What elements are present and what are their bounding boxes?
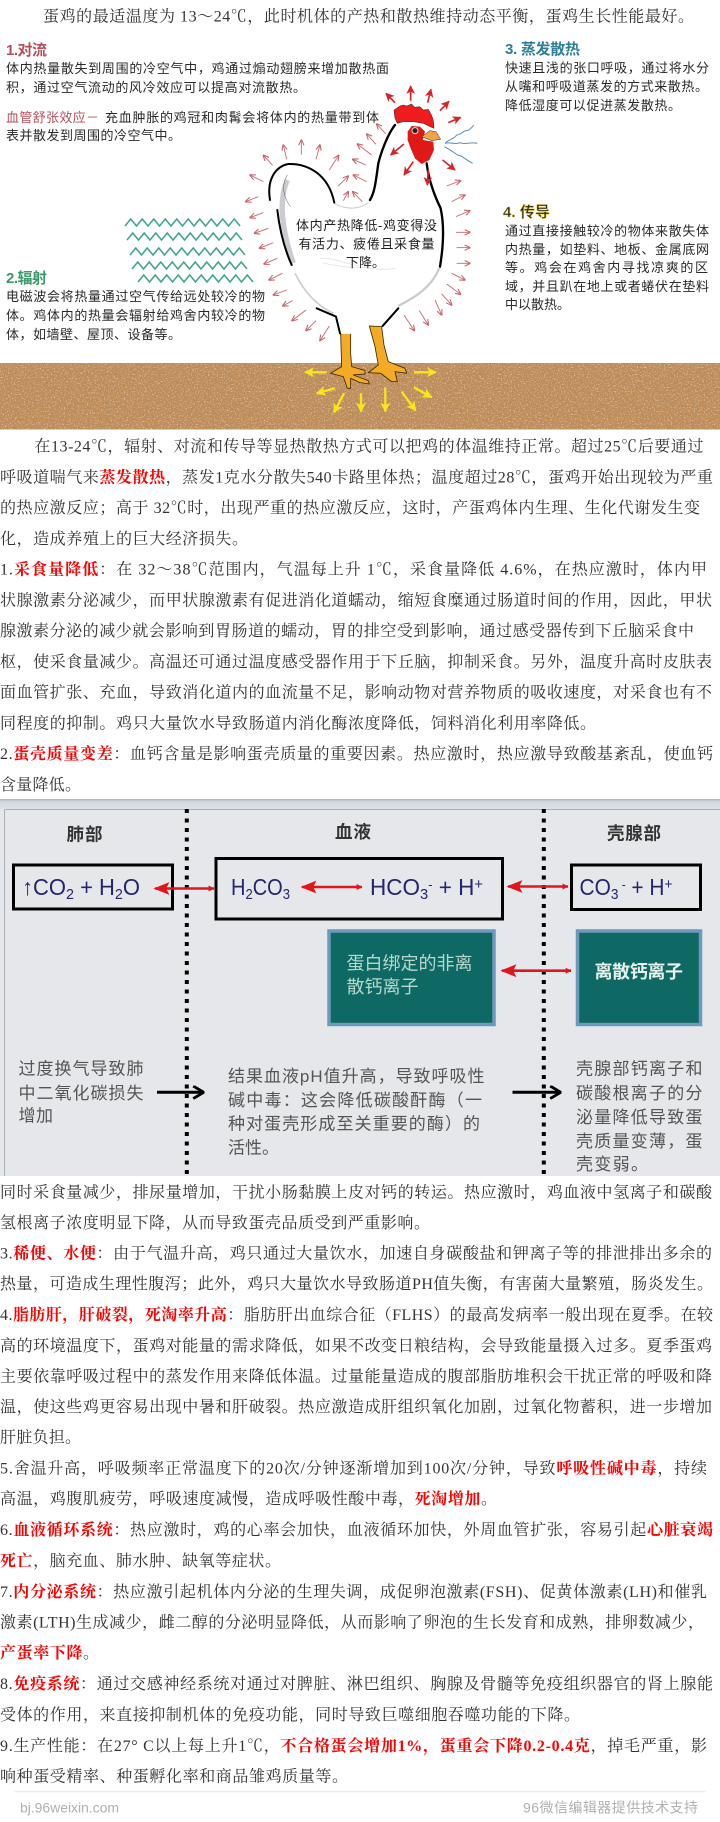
paragraph: temperature ranges: 在13-24℃，辐射、对流和传导等显热散热方式可以把鸡的体温维持正常。超过25℃后要通过 [34, 436, 703, 456]
text block: convection: 表并散发到周围的冷空气中。 [6, 128, 181, 143]
paragraph 3: loose droppings [0, 1244, 713, 1293]
lung outcome text: 增加 [18, 1106, 53, 1126]
text block: evaporation: 从嘴和呼吸道蒸发的方式来散热。 [505, 79, 708, 94]
text block: evaporation: 快速且浅的张口呼吸，通过将水分 [505, 60, 709, 76]
box: blood equation [216, 858, 502, 919]
paragraph: temperature ranges [0, 436, 713, 548]
paragraph 4: fatty liver: 高的环境温度下，蛋鸡对能量的需求降低，如果不改变日粮结构，会导致能量摄入过多。夏季蛋鸡 [0, 1336, 712, 1355]
text block: convection: 充血肿胀的鸡冠和肉髯会将体内的热量带到体 [105, 110, 379, 125]
red exchange arrows [155, 886, 571, 971]
ground [0, 363, 720, 430]
paragraph 6: circulatory system: 死亡，脑充血、肺水肿、缺氧等症状。 [0, 1551, 281, 1570]
box: blood equation: 2 [245, 886, 253, 903]
column headings [66, 822, 661, 844]
paragraph 3: loose droppings: 热量，可造成生理性腹泻；此外，鸡只大量饮水导致肠道PH值失衡，有害菌大量繁殖，肠炎发生。 [0, 1274, 713, 1293]
paragraph 7: endocrine system: 7.内分泌系统：热应激引起机体内分泌的生理失调，成促卵泡激素(FSH)、促黄体激素(LH)和催乳 [0, 1582, 707, 1601]
box: shell gland equation: + H [626, 874, 665, 900]
text block: conduction: 内热量，如垫料、地板、金属底网 [505, 242, 709, 257]
box: blood equation: - [428, 877, 432, 892]
paragraph 5: respiration [0, 1458, 707, 1508]
conduction arrows [305, 372, 436, 413]
paragraph 9: production performance: 9.生产性能：在27° C以上每上升1℃，不合格蛋会增加1%，蛋重会下降0.2-0.4克，掉毛严重，影 [0, 1736, 707, 1756]
chicken body caption: 下降。 [346, 255, 385, 270]
shell gland outcome text: 泌量降低导致蛋 [576, 1108, 702, 1127]
paragraph 8: immune system: 受体的作用，来直接抑制机体的免疫功能，同时导致巨噬细胞吞噬功能的下降。 [0, 1706, 580, 1724]
paragraph: reduced urine and calcium transport [0, 1184, 713, 1232]
paragraph 5: respiration: 高温，鸡腹肌疲劳，呼吸速度减慢，造成呼吸性酸中毒，死淘增加。 [0, 1489, 497, 1508]
footer: 96微信编辑器提供技术支持 [523, 1800, 698, 1816]
box: lung equation: 2 [66, 886, 74, 903]
footer [15, 1792, 705, 1816]
teal box: ionized calcium: 离散钙离子 [594, 961, 683, 982]
paragraph 2: eggshell quality [0, 744, 713, 794]
text block: evaporation [505, 40, 709, 113]
text block: radiation [6, 269, 265, 342]
box: lung equation: ↑CO [22, 874, 68, 900]
box: blood equation: + H [432, 874, 474, 900]
paragraph 1: reduced feed intake: 1.采食量降低：在 32～38℃范围内，气温每上升 1℃，采食量降低 4.6%，在热应激时，体内甲 [0, 560, 707, 578]
paragraph 1: reduced feed intake: 面血管扩张、充血，导致消化道内的血流量不足，影响动物对营养物质的吸收速度，对采食也有不 [0, 682, 712, 702]
paragraph 6: circulatory system: 6.血液循环系统：热应激时，鸡的心率会加快，血液循环加快，外周血管扩张，容易引起心脏衰竭 [0, 1520, 713, 1539]
blood outcome text: 种对蛋壳形成至关重要的酶）的 [228, 1114, 480, 1134]
paragraph 1: reduced feed intake: 状腺激素分泌减少，而甲状腺激素有促进消化道蠕动，缩短食糜通过肠道时间的作用，因此，甲状 [0, 591, 712, 609]
paragraph 4: fatty liver: 温，使这些鸡更容易出现中暑和肝破裂。热应激造成肝组织氧化加剧，过氧化物蓄积，进一步增加 [0, 1397, 712, 1416]
blood outcome text [228, 1067, 484, 1158]
column headings: 肺部 [66, 824, 102, 844]
column divider dotted lines [187, 809, 544, 1176]
paragraph: reduced urine and calcium transport: 氢根离子浓度明显下降，从而导致蛋壳品质受到严重影响。 [0, 1214, 430, 1232]
teal box: ionized calcium [578, 931, 700, 1024]
teal box: protein-bound calcium [329, 931, 494, 1024]
text block: evaporation: 3. 蒸发散热 [505, 40, 580, 58]
chicken body [269, 120, 444, 334]
paragraph 1: reduced feed intake: 腺激素分泌的减少就会影响到胃肠道的蠕动，胃的排空受到影响，通过感受器传到下丘脑采食中 [0, 622, 694, 640]
chicken shading [282, 180, 439, 313]
text block: radiation: 电磁波会将热量通过空气传给远处较冷的物 [6, 289, 265, 304]
chicken face [408, 126, 434, 164]
chicken body caption [296, 218, 437, 270]
box: shell gland equation: - [618, 877, 626, 892]
paragraph 5: respiration: 5.舍温升高，呼吸频率正常温度下的20次/分钟逐渐增加到100次/分钟，导致呼吸性碱中毒，持续 [0, 1458, 707, 1478]
paragraph 2: eggshell quality: 2.蛋壳质量变差：血钙含量是影响蛋壳质量的重要因素。热应激时，热应激导致酸基紊乱，使血钙 [0, 744, 713, 763]
chicken comb [394, 104, 434, 128]
blood outcome text: 碱中毒：这会降低碳酸酐酶（一 [228, 1091, 482, 1110]
box: blood equation: + [474, 876, 483, 893]
shell gland outcome text: 壳腺部钙离子和 [576, 1060, 702, 1078]
text block: radiation: 体，如墙壁、屋顶、设备等。 [6, 327, 181, 342]
text block: convection: 1.对流 [6, 41, 47, 59]
text block: conduction: 中以散热。 [505, 297, 570, 312]
chicken eye [412, 128, 418, 134]
box: shell gland equation: 3 [611, 886, 618, 903]
footer: bj.96weixin.com [20, 1800, 119, 1816]
black result arrows [157, 1091, 560, 1094]
text block: convection: 体内热量散失到周围的冷空气中，鸡通过煽动翅膀来增加散热面 [6, 61, 389, 76]
text block: conduction: 等。鸡会在鸡舍内寻找凉爽的区 [505, 260, 708, 275]
heat arrows: head [386, 86, 461, 185]
text block: convection [6, 41, 389, 143]
box: shell gland equation: + [665, 876, 673, 893]
text block: radiation: 2.辐射 [6, 269, 47, 287]
paragraph 4: fatty liver: 肝脏负担。 [0, 1428, 81, 1446]
paragraph 8: immune system: 8.免疫系统：通过交感神经系统对通过对脾脏、淋巴组织、胸腺及骨髓等免疫组织器官的肾上腺能 [0, 1674, 713, 1693]
box: lung equation [14, 865, 172, 909]
text block: conduction [503, 204, 709, 312]
blood outcome text: 结果血液pH值升高，导致呼吸性 [228, 1067, 484, 1086]
chicken body caption: 有活力、疲倦且采食量 [298, 236, 434, 252]
paragraph 1: reduced feed intake: 枢，使采食量减少。高温还可通过温度感受器作用于下丘脑，抑制采食。另外，温度升高时皮肤表 [0, 652, 712, 671]
paragraph 6: circulatory system [0, 1520, 713, 1570]
text block: radiation: 体。鸡体内的热量会辐射给鸡舍内较冷的物 [6, 308, 265, 323]
paragraph 7: endocrine system [0, 1582, 707, 1662]
blood outcome text: 活性。 [228, 1138, 279, 1158]
paragraph 3: loose droppings: 3.稀便、水便：由于气温升高，鸡只通过大量饮水，加速自身碳酸盐和钾离子等的排泄排出多余的 [0, 1244, 712, 1262]
text block: conduction: 4. 传导 [503, 204, 550, 221]
paragraph 7: endocrine system: 激素(LTH)生成减少，雌二醇的分泌明显降低，从而影响了卵泡的生长发育和成熟，排卵数减少， [0, 1614, 704, 1632]
box: shell gland equation: CO [580, 874, 614, 900]
icon: chicken [246, 86, 477, 413]
box: lung equation: 2 [115, 886, 123, 903]
paragraph 9: production performance [0, 1736, 707, 1786]
paragraph 2: eggshell quality: 含量降低。 [0, 776, 81, 794]
paragraph 4: fatty liver [0, 1305, 714, 1446]
shell gland outcome text: 壳变弱。 [576, 1155, 648, 1174]
heat arrows: body [246, 124, 470, 341]
shell gland outcome text: 碳酸根离子的分 [576, 1084, 702, 1103]
paragraph 1: reduced feed intake: 同程度的抑制。鸡只大量饮水导致肠道内消化酶浓度降低，饲料消化利用率降低。 [0, 714, 596, 732]
box: blood equation: 3 [420, 886, 428, 903]
intro sentence: 蛋鸡的最适温度为 13～24℃，此时机体的产热和散热维持动态平衡，蛋鸡生长性能最好。 [43, 8, 694, 26]
paragraph 7: endocrine system: 产蛋率下降。 [0, 1643, 99, 1662]
paragraph 4: fatty liver: 4.脂肪肝，肝破裂，死淘率升高：脂肪肝出血综合征（FLHS）的最高发病率一般出现在夏季。在较 [0, 1305, 714, 1325]
lung outcome text: 中二氧化碳损失 [18, 1084, 144, 1103]
box: blood equation: HCO [370, 874, 421, 900]
box: blood equation: CO [253, 874, 283, 900]
text block: evaporation: 降低湿度可以促进蒸发散热。 [505, 98, 681, 113]
box: blood equation: H [231, 874, 248, 900]
lung outcome text [18, 1060, 144, 1126]
paragraph 1: reduced feed intake [0, 560, 712, 732]
box: blood equation: 3 [283, 886, 290, 903]
text block: convection: 血管舒张效应－ [6, 110, 99, 125]
paragraph 4: fatty liver: 主要依靠呼吸过程中的蒸发作用来降低体温。过量能量造成的腹部脂肪堆积会干扰正常的呼吸和降 [0, 1368, 712, 1386]
chicken legs and feet [331, 326, 407, 388]
text block: convection: 积，通过空气流动的风冷效应可以提高对流散热。 [6, 80, 306, 95]
panel: calcium and acid-base diagram [0, 799, 720, 1176]
chicken outline [269, 125, 443, 333]
text block: conduction: 域，并且趴在地上或者蜷伏在垫料 [505, 279, 709, 294]
paragraph: temperature ranges: 呼吸道喘气来蒸发散热，蒸发1克水分散失540卡路里体热；温度超过28℃，蛋鸡开始出现较为严重 [0, 467, 713, 486]
lung outcome text: 过度换气导致肺 [18, 1060, 144, 1078]
column headings: 壳腺部 [607, 824, 661, 844]
box: shell gland equation [572, 865, 700, 910]
column headings: 血液 [335, 822, 372, 842]
box: lung equation: O [123, 874, 140, 900]
icon: radiation waves [125, 219, 253, 282]
teal box: protein-bound calcium: 蛋白绑定的非离 [346, 954, 472, 974]
text block: conduction: 通过直接接触较冷的物体来散失体 [505, 224, 709, 238]
paragraph: temperature ranges: 化，造成养殖上的巨大经济损失。 [0, 530, 248, 548]
chicken beak [422, 131, 441, 141]
panel: chicken heat dissipation illustration [0, 40, 720, 430]
paragraph: reduced urine and calcium transport: 同时采食量减少，排尿量增加，干扰小肠黏膜上皮对钙的转运。热应激时，鸡血液中氢离子和碳酸 [0, 1184, 713, 1202]
teal box: protein-bound calcium: 散钙离子 [346, 977, 418, 997]
shell gland outcome text [576, 1060, 702, 1174]
box: lung equation: + H [74, 874, 115, 900]
chicken body caption: 体内产热降低-鸡变得没 [296, 218, 437, 233]
shell gland outcome text: 壳质量变薄，蛋 [576, 1132, 702, 1151]
paragraph: temperature ranges: 的热应激反应；高于 32℃时，出现严重的热应激反应，这时，产蛋鸡体内生理、生化代谢发生变 [0, 498, 700, 517]
paragraph 9: production performance: 响种蛋受精率、种蛋孵化率和商品雏鸡质量等。 [0, 1768, 348, 1786]
icon: evaporation breath [444, 125, 477, 163]
paragraph 8: immune system [0, 1674, 713, 1724]
